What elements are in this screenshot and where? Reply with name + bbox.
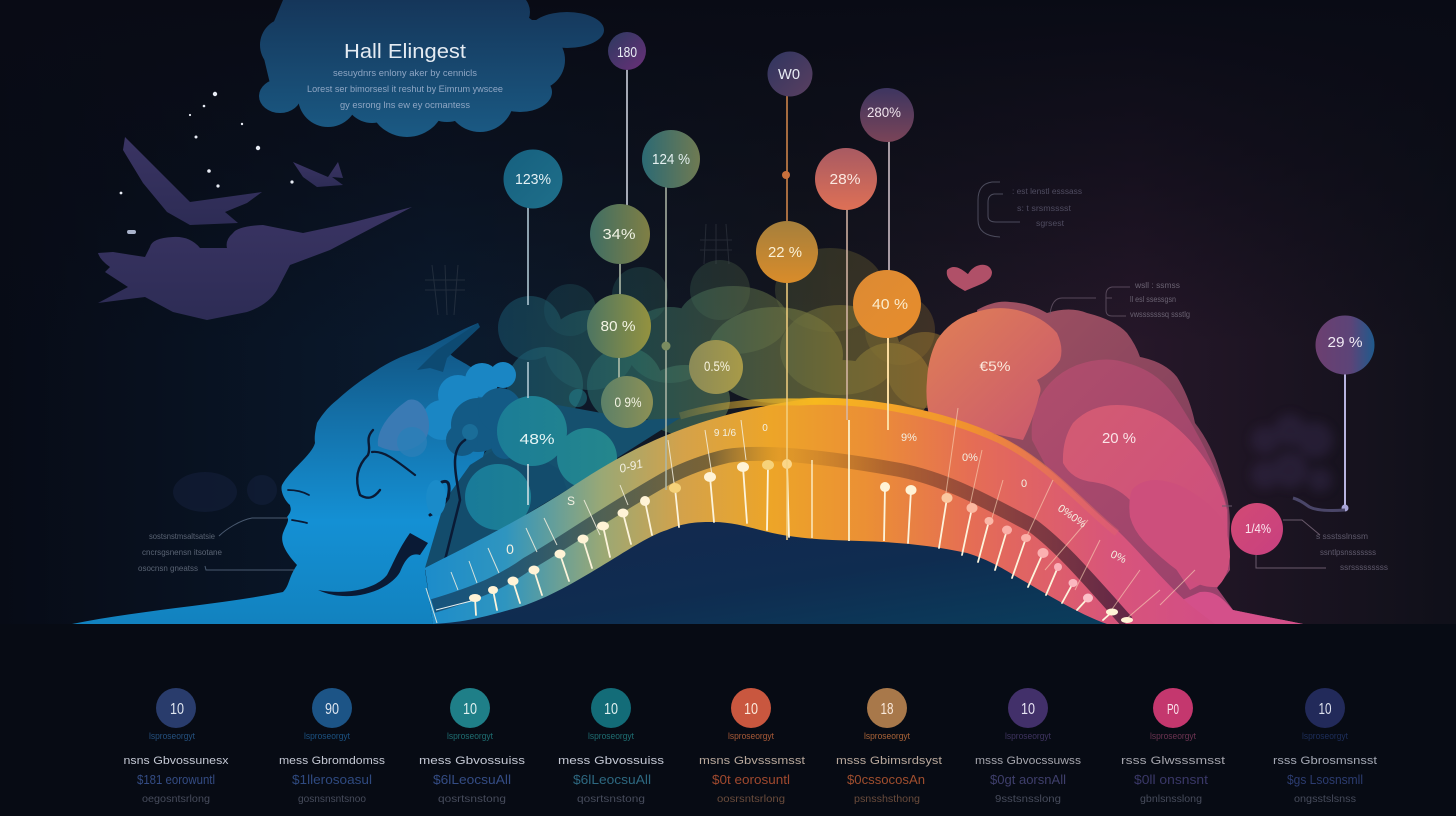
- bubble 14%: 1/4%: [1245, 521, 1271, 536]
- face details: [288, 430, 465, 560]
- scale ticks and nodes along the arc: [436, 420, 1133, 623]
- band value labels: [506, 423, 1128, 566]
- legend item 1: oegosntsrlong: [142, 793, 210, 805]
- title subtitle text: [307, 68, 503, 111]
- bubble 280%: 280%: [867, 104, 901, 120]
- legend item 5: 10: [744, 701, 758, 718]
- legend item 3: lsproseorgyt: [447, 731, 493, 741]
- left annotation: cncrsgsnensn itsotane: [142, 548, 223, 557]
- hair wisp: [417, 323, 480, 372]
- title subtitle text: gy esrong lns ew ey ocmantess: [340, 100, 470, 111]
- rainbow arc band: [425, 399, 1215, 624]
- band value labels: 9%: [901, 432, 917, 444]
- band value labels: S: [567, 494, 575, 508]
- bubble 80%: 80 %: [600, 318, 636, 335]
- ground below the chart: [0, 624, 1456, 816]
- background clouds behind the arc: [440, 248, 963, 560]
- legend item 7: 9sstsnsslong: [995, 793, 1061, 805]
- thin ticks on the band: [426, 420, 746, 623]
- bubble 123%: [504, 150, 562, 208]
- legend item 8: gbnlsnsslong: [1140, 793, 1202, 805]
- left annotation: sostsnstmsaltsatsie: [149, 532, 216, 541]
- band value labels: 0%: [1109, 548, 1128, 566]
- bubble 0 9%: 0 9%: [614, 394, 642, 410]
- band value labels: 9 1/6: [714, 428, 737, 439]
- small heart cloud: [947, 265, 992, 291]
- bubble 29%: [1316, 316, 1374, 374]
- legend item 9: ongsstslsnss: [1294, 793, 1356, 805]
- right annotation: lower callouts: ssntlpsnsssssss: [1320, 548, 1376, 557]
- legend item 2: $1llerosoasul: [292, 772, 372, 787]
- bubble 22%: 22 %: [768, 244, 802, 261]
- bubble 22%: [756, 221, 818, 283]
- legend item 4: mess Gbvossuiss: [558, 755, 665, 767]
- legend item 4: $6lLeocsuAll: [573, 772, 651, 787]
- band value labels: 0: [506, 541, 514, 557]
- legend item 6: psnsshsthong: [854, 793, 920, 805]
- legend item 2: gosnsnsntsnoo: [298, 793, 366, 805]
- central dark mound: [433, 522, 1107, 624]
- bubble 29%: 29 %: [1328, 334, 1362, 351]
- bubble 0 9%: [601, 376, 653, 428]
- right annotation: lower callouts: s ssstsslnssm: [1316, 532, 1368, 541]
- legend item 8: $0ll onsnsnt: [1134, 772, 1208, 787]
- legend item 6: [836, 688, 942, 805]
- teal circles behind the arc: [465, 389, 617, 530]
- legend item 4: lsproseorgyt: [588, 731, 634, 741]
- legend item 5: oosrsntsrlong: [717, 793, 785, 805]
- label 48% on teal cloud: 48%: [520, 431, 554, 448]
- bubble 0.5%: 0.5%: [704, 358, 730, 374]
- ear: [426, 480, 446, 516]
- hair clouds: [378, 362, 567, 568]
- bubble 124%: [642, 130, 700, 188]
- head silhouette: [72, 323, 567, 624]
- legend item 3: $6lLeocsuAll: [433, 772, 511, 787]
- bubble 28%: [815, 148, 877, 210]
- legend item 5: msns Gbvsssmsst: [699, 755, 805, 767]
- bubble W0: W0: [778, 66, 800, 83]
- left annotation: osocnsn gneatss: [138, 564, 198, 573]
- arc dark strip: [433, 454, 1127, 622]
- legend item 1: $181 eorowuntl: [137, 772, 215, 787]
- title subtitle text: Lorest ser bimorsesl it reshut by Eimrum ywscee: [307, 84, 503, 95]
- legend item 6: msss Gbimsrdsyst: [836, 755, 942, 767]
- label 20% on pink cloud: 20 %: [1102, 430, 1136, 447]
- legend item 8: [1121, 688, 1225, 805]
- legend item 2: mess Gbromdomss: [279, 755, 386, 767]
- birds silhouettes: [98, 137, 412, 320]
- right annotation: middle bracket: ll esl ssessgsn: [1130, 295, 1176, 304]
- legend item 1: lsproseorgyt: [149, 731, 195, 741]
- title subtitle text: sesuydnrs enlony aker by cennicls: [333, 68, 477, 79]
- legend item 5: $0t eorosuntl: [712, 772, 790, 787]
- legend item 3: 10: [463, 701, 477, 718]
- legend item 7: lsproseorgyt: [1005, 731, 1051, 741]
- title: Hall Elingest: [344, 41, 466, 63]
- band value labels: 0: [762, 423, 768, 434]
- bottom legend row: [124, 688, 1377, 805]
- title cloud: [259, 0, 604, 137]
- legend item 9: $gs Lsosnsmll: [1287, 772, 1363, 787]
- bubble 80%: [587, 294, 651, 358]
- bubble 0.5%: [689, 340, 743, 394]
- legend item 1: 10: [170, 701, 184, 718]
- right annotation: middle bracket: vwsssssssq ssstlg: [1130, 310, 1190, 319]
- legend item 6: lsproseorgyt: [864, 731, 910, 741]
- legend item 6: 18: [880, 701, 894, 718]
- legend item 8: rsss Glwsssmsst: [1121, 755, 1225, 767]
- legend item 5: lsproseorgyt: [728, 731, 774, 741]
- right annotation: middle bracket: wsll : ssmss: [1134, 281, 1180, 290]
- bubble 123%: 123%: [515, 171, 551, 188]
- legend item 3: [419, 688, 526, 805]
- legend item 2: [279, 688, 386, 805]
- band value labels: 0%0%: [1055, 503, 1088, 531]
- legend item 7: [975, 688, 1082, 805]
- right side clouds: plum, coral, pink: [926, 265, 1303, 624]
- legend item 4: qosrtsnstong: [577, 793, 645, 805]
- bubble W0: [768, 52, 812, 96]
- percentage bubbles and their stems: [504, 32, 1374, 555]
- legend item 2: 90: [325, 701, 339, 718]
- label 65% on coral cloud: €5%: [980, 358, 1010, 374]
- right annotation: lower callouts: ssrsssssssss: [1340, 563, 1388, 572]
- legend item 8: lsproseorgyt: [1150, 731, 1196, 741]
- legend item 6: $0cssocosAn: [847, 772, 925, 787]
- legend item 2: lsproseorgyt: [304, 731, 350, 741]
- legend item 9: rsss Gbrosmsnsst: [1273, 755, 1377, 767]
- jaw shadow: [318, 533, 428, 596]
- bubble 34%: 34%: [602, 226, 636, 243]
- bubble 34%: [590, 204, 650, 264]
- bubble 40%: 40 %: [872, 296, 908, 313]
- legend item 4: 10: [604, 701, 618, 718]
- legend item 4: [558, 688, 665, 805]
- legend item 3: qosrtsnstong: [438, 793, 506, 805]
- band value labels: 0-91: [618, 456, 644, 476]
- legend item 9: [1273, 688, 1377, 805]
- right annotation: middle bracket: [1050, 281, 1190, 319]
- band value labels: 0: [1021, 478, 1027, 490]
- bubble 280%: [860, 88, 914, 142]
- legend item 5: [699, 688, 805, 805]
- arc highlight edge: [680, 401, 1117, 533]
- legend item 1: nsns Gbvossunesx: [124, 755, 229, 767]
- legend item 7: msss Gbvocssuwss: [975, 755, 1082, 767]
- bubble 40%: [853, 270, 921, 338]
- right annotation: lower callouts: [1222, 498, 1388, 572]
- right annotation: top bracket: sgrsest: [1036, 219, 1065, 228]
- legend item 8: P0: [1167, 701, 1179, 718]
- left annotation: [138, 518, 294, 573]
- faint background smoke motifs: [173, 224, 1333, 512]
- legend item 3: mess Gbvossuiss: [419, 755, 526, 767]
- legend item 9: lsproseorgyt: [1302, 731, 1348, 741]
- bubble 28%: 28%: [830, 171, 860, 188]
- bubble 180: [608, 32, 646, 70]
- legend item 1: [124, 688, 229, 805]
- right annotation: top bracket: s: t srsmsssst: [1017, 204, 1072, 213]
- legend item 7: 10: [1021, 701, 1035, 718]
- right annotation: top bracket: [978, 182, 1082, 237]
- band value labels: 0%: [962, 452, 978, 464]
- legend item 7: $0gt aorsnAll: [990, 772, 1066, 787]
- legend item 9: 10: [1318, 701, 1332, 718]
- stars: [120, 92, 294, 234]
- bubble 124%: 124 %: [652, 151, 690, 168]
- bubble 14%: [1231, 503, 1283, 555]
- bubble 180: 180: [617, 44, 637, 61]
- right annotation: top bracket: : est lenstl esssass: [1012, 187, 1082, 196]
